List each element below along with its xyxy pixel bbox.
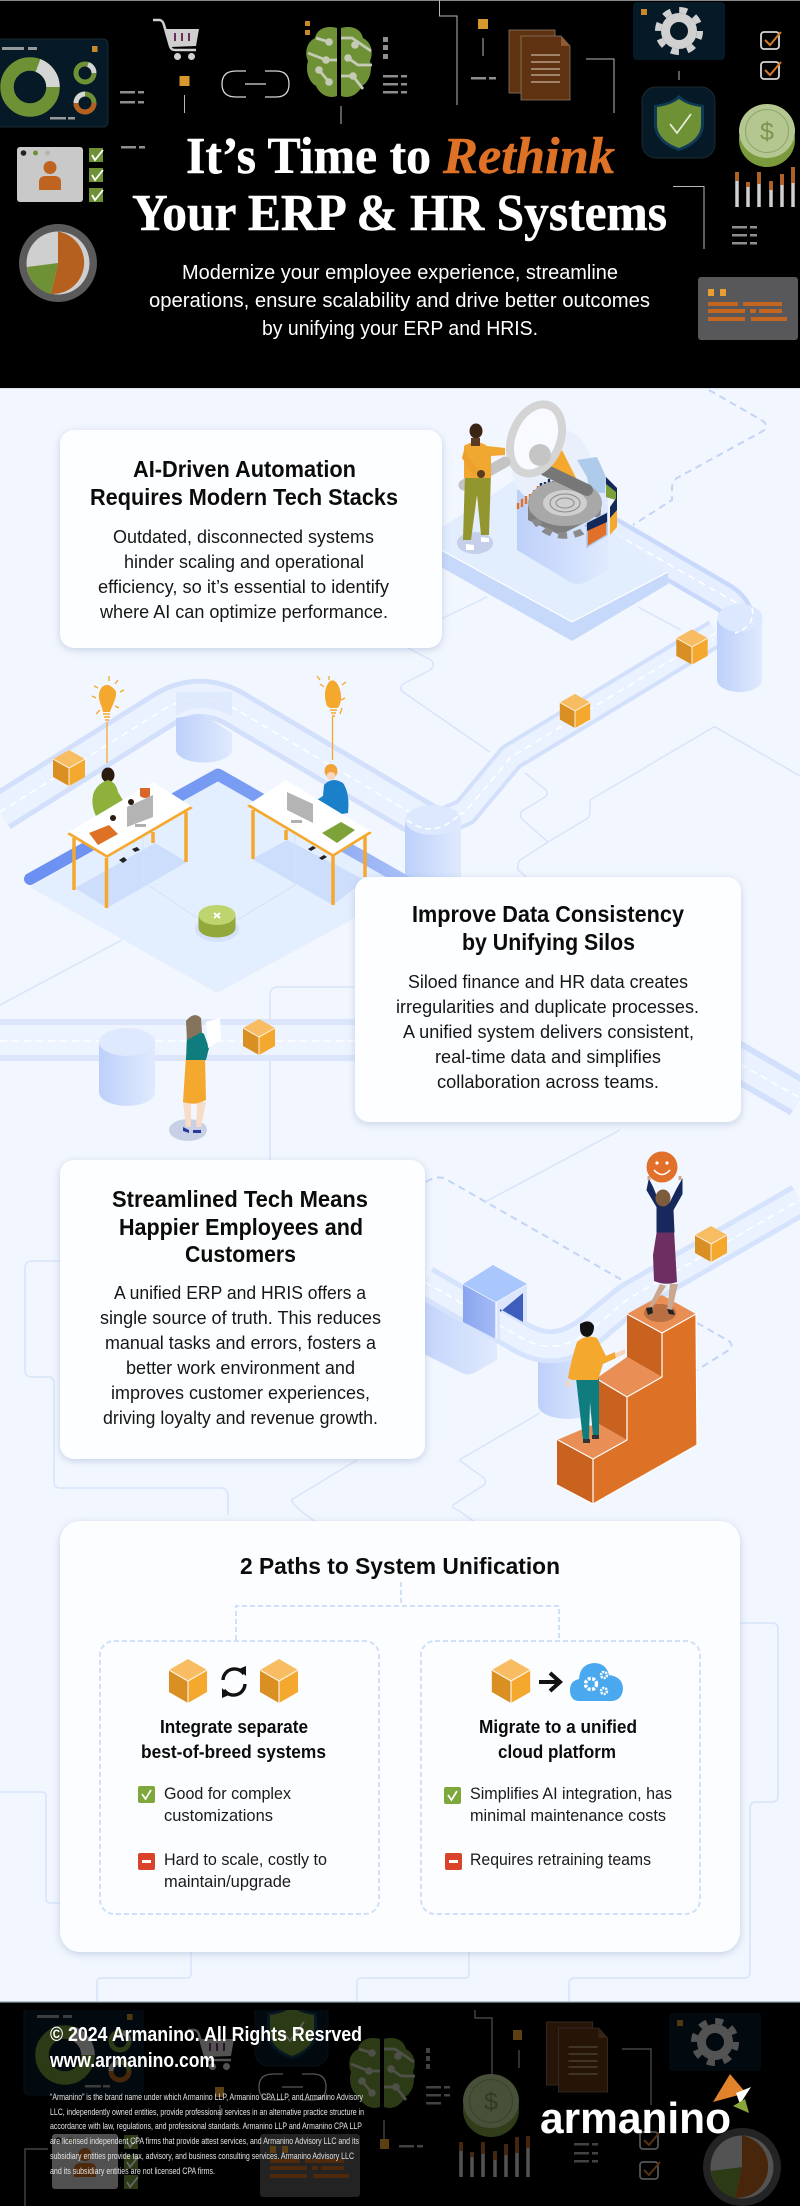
footer legal text: “Armanino” is the brand name under which Armanino LLP, Armanino CPA LLP, and Armanino Advisory [50, 2092, 363, 2103]
title: It’s Time to [186, 128, 431, 185]
desk: right [247, 780, 372, 905]
pipe: tower to right cylinder [605, 528, 742, 640]
platform wiring [143, 832, 295, 920]
body text: streamlined tech: improves customer experiences, [111, 1382, 370, 1403]
body text: improve data consistency: collaboration across teams. [437, 1071, 659, 1092]
pro: integrate: customizations [164, 1807, 273, 1825]
woman with paper [169, 1015, 221, 1141]
dashed connector tree [236, 1582, 559, 1640]
body text: streamlined tech [100, 1282, 381, 1428]
pro: migrate [444, 1785, 672, 1825]
body text: AI-driven automation: where AI can optimize performance. [99, 601, 388, 622]
dashed route lines [426, 390, 766, 1370]
icon: cube [492, 1659, 530, 1703]
subtitle: by unifying your ERP and HRIS. [262, 318, 538, 340]
footer legal text: accordance with law, regulations, and professional standards. Armanino LLP and Armanino CPA LLP [50, 2121, 362, 2132]
icon: documents [509, 30, 570, 100]
desk shadow patches [75, 840, 365, 908]
cube: right pipe [676, 629, 708, 665]
subheading: integrate: Integrate separate [160, 1716, 308, 1737]
cylinder: central support [405, 805, 461, 885]
orange stairs [557, 1295, 697, 1504]
cube: pipe centre [560, 694, 590, 728]
woman holding smiley [644, 1152, 682, 1322]
icon: dashboard [0, 39, 108, 127]
icon: circuit brain [306, 27, 372, 97]
panel: improve data consistency [355, 877, 741, 1122]
heading: improve data consistency: by Unifying Silos [462, 929, 635, 955]
body text: streamlined tech: driving loyalty and revenue growth. [103, 1407, 378, 1428]
footer legal text: subsidiary entities provide tax, advisory, and business consulting services. Armanino Advisory LLC [50, 2151, 354, 2162]
footer legal text [50, 2092, 364, 2177]
heading: AI-driven automation: Requires Modern Tech Stacks [90, 484, 398, 510]
cylinder: left pipe support [176, 692, 232, 762]
body text: AI-driven automation: efficiency, so it’s essential to identify [98, 576, 390, 597]
icon: pie chart [19, 224, 97, 302]
heading: improve data consistency: Improve Data Consistency [412, 901, 684, 927]
man on stairs [566, 1321, 625, 1443]
header accent lines and dashes [120, 0, 757, 249]
icon: shopping cart [153, 20, 199, 60]
body text: streamlined tech: single source of truth. This reduces [100, 1307, 381, 1328]
path box: migrate [421, 1641, 700, 1914]
subtitle: Modernize your employee experience, streamline [182, 262, 618, 284]
green button [195, 905, 239, 942]
person with magnifier [457, 424, 505, 554]
icon: checklist [761, 32, 781, 79]
footer copyright: © 2024 Armanino. All Rights Resrved [50, 2024, 362, 2046]
heading: streamlined tech: Customers [185, 1241, 296, 1267]
pipe: lower right through tunnel [425, 1200, 800, 1346]
large platform under desks [30, 781, 408, 993]
block left of tunnel [406, 1289, 497, 1374]
pro: integrate: Good for complex [164, 1785, 292, 1803]
person at left desk [92, 768, 140, 863]
subheading: integrate [141, 1716, 326, 1762]
icon: code panel [698, 277, 798, 340]
armanino logo [540, 2074, 751, 2143]
heading: streamlined tech: Happier Employees and [119, 1214, 363, 1240]
icon: shield [642, 87, 715, 158]
con: integrate [138, 1851, 327, 1891]
desk: left [67, 782, 193, 908]
panel: 2 paths to system unification [60, 1521, 740, 1952]
icon: chain link [222, 71, 289, 97]
title: Rethink [442, 128, 615, 185]
body text: AI-driven automation [98, 526, 390, 622]
icon: coin [739, 104, 795, 167]
path box: integrate [100, 1641, 379, 1914]
subheading: migrate: cloud platform [498, 1741, 616, 1762]
pipe: right of card two [700, 1040, 800, 1098]
body text: AI-driven automation: hinder scaling and operational [124, 551, 364, 572]
con: integrate: maintain/upgrade [164, 1873, 291, 1891]
icon: bars [737, 166, 800, 207]
icon: cloud with gears [570, 1663, 623, 1701]
background circuit lines [0, 597, 800, 2004]
cube: desk left [53, 750, 85, 786]
cylinder under stairs pipe [538, 1360, 598, 1419]
illustration: gear with data charts and magnifier [464, 397, 617, 547]
heading: 2 paths: 2 Paths to System Unification [240, 1553, 560, 1579]
cube: lower right [695, 1226, 727, 1262]
icon: cube right [260, 1659, 298, 1703]
footer dimmed icon backdrop [24, 1995, 781, 2206]
panel: AI-driven automation [60, 430, 442, 648]
pipe: centre to right cylinder [433, 633, 716, 826]
body text: streamlined tech: better work environment and [126, 1357, 355, 1378]
icon: arrow [539, 1673, 560, 1691]
icon: gear [633, 2, 725, 60]
pro: migrate: minimal maintenance costs [470, 1807, 666, 1825]
body text: improve data consistency: A unified system delivers consistent, [403, 1021, 694, 1042]
subheading: migrate: Migrate to a unified [479, 1716, 637, 1737]
pro: integrate [138, 1785, 292, 1825]
heading: streamlined tech [112, 1186, 368, 1267]
footer panel [0, 1995, 800, 2206]
body text: improve data consistency: real-time data and simplifies [435, 1046, 661, 1067]
title: Your ERP & HR Systems [132, 185, 667, 242]
footer legal text: are licensed independent CPA firms that provide attest services, and Armanino Advisory LLC and its [50, 2136, 359, 2147]
subheading: migrate [479, 1716, 637, 1762]
cylinder: right support [717, 604, 762, 692]
main background [0, 388, 800, 2004]
heading: AI-driven automation: AI-Driven Automation [133, 456, 356, 482]
con: integrate: Hard to scale, costly to [164, 1851, 327, 1869]
panel: streamlined tech [60, 1160, 425, 1459]
horizontal pipe by woman [0, 1019, 380, 1061]
footer copyright [49, 2024, 362, 2072]
icon: sync arrows [222, 1666, 246, 1698]
title [132, 128, 667, 242]
blue pipe chevron [30, 774, 405, 881]
lightbulb: right [317, 676, 346, 760]
subtitle [149, 262, 650, 340]
footer legal text: LLC, independently owned entities, provide professional services in an alternative practice structure in [50, 2107, 364, 2118]
blue tunnel [463, 1265, 527, 1339]
icon: cube left [169, 1659, 207, 1703]
body text: AI-driven automation: Outdated, disconnected systems [113, 526, 374, 547]
lightbulb: left [92, 676, 124, 763]
footer legal text: and its subsidiary entities are not licensed CPA firms. [50, 2166, 215, 2177]
footer copyright: www.armanino.com [49, 2050, 215, 2072]
cylinder under horizontal pipe [99, 1028, 155, 1106]
subtitle: operations, ensure scalability and drive better outcomes [149, 290, 650, 312]
platform under tower [430, 470, 668, 641]
heading: streamlined tech: Streamlined Tech Means [112, 1186, 368, 1212]
subheading: integrate: best-of-breed systems [141, 1741, 326, 1762]
pipe: lower-left through centre [0, 699, 433, 826]
heading: AI-driven automation [90, 456, 398, 510]
header panel [0, 0, 800, 389]
icon: profile window [17, 147, 103, 202]
heading: improve data consistency [412, 901, 684, 955]
armanino logo: armanino [540, 2094, 731, 2143]
person at right desk [308, 764, 348, 860]
body text: improve data consistency: irregularities and duplicate processes. [396, 996, 699, 1017]
pro: migrate: Simplifies AI integration, has [470, 1785, 672, 1803]
body text: improve data consistency: Siloed finance and HR data creates [408, 971, 688, 992]
body text: streamlined tech: A unified ERP and HRIS offers a [114, 1282, 367, 1303]
body text: improve data consistency [396, 971, 699, 1092]
body text: streamlined tech: manual tasks and errors, fosters a [105, 1332, 377, 1353]
con: migrate: Requires retraining teams [470, 1851, 651, 1869]
tower block [517, 490, 608, 584]
cube: horizontal pipe [243, 1019, 275, 1055]
